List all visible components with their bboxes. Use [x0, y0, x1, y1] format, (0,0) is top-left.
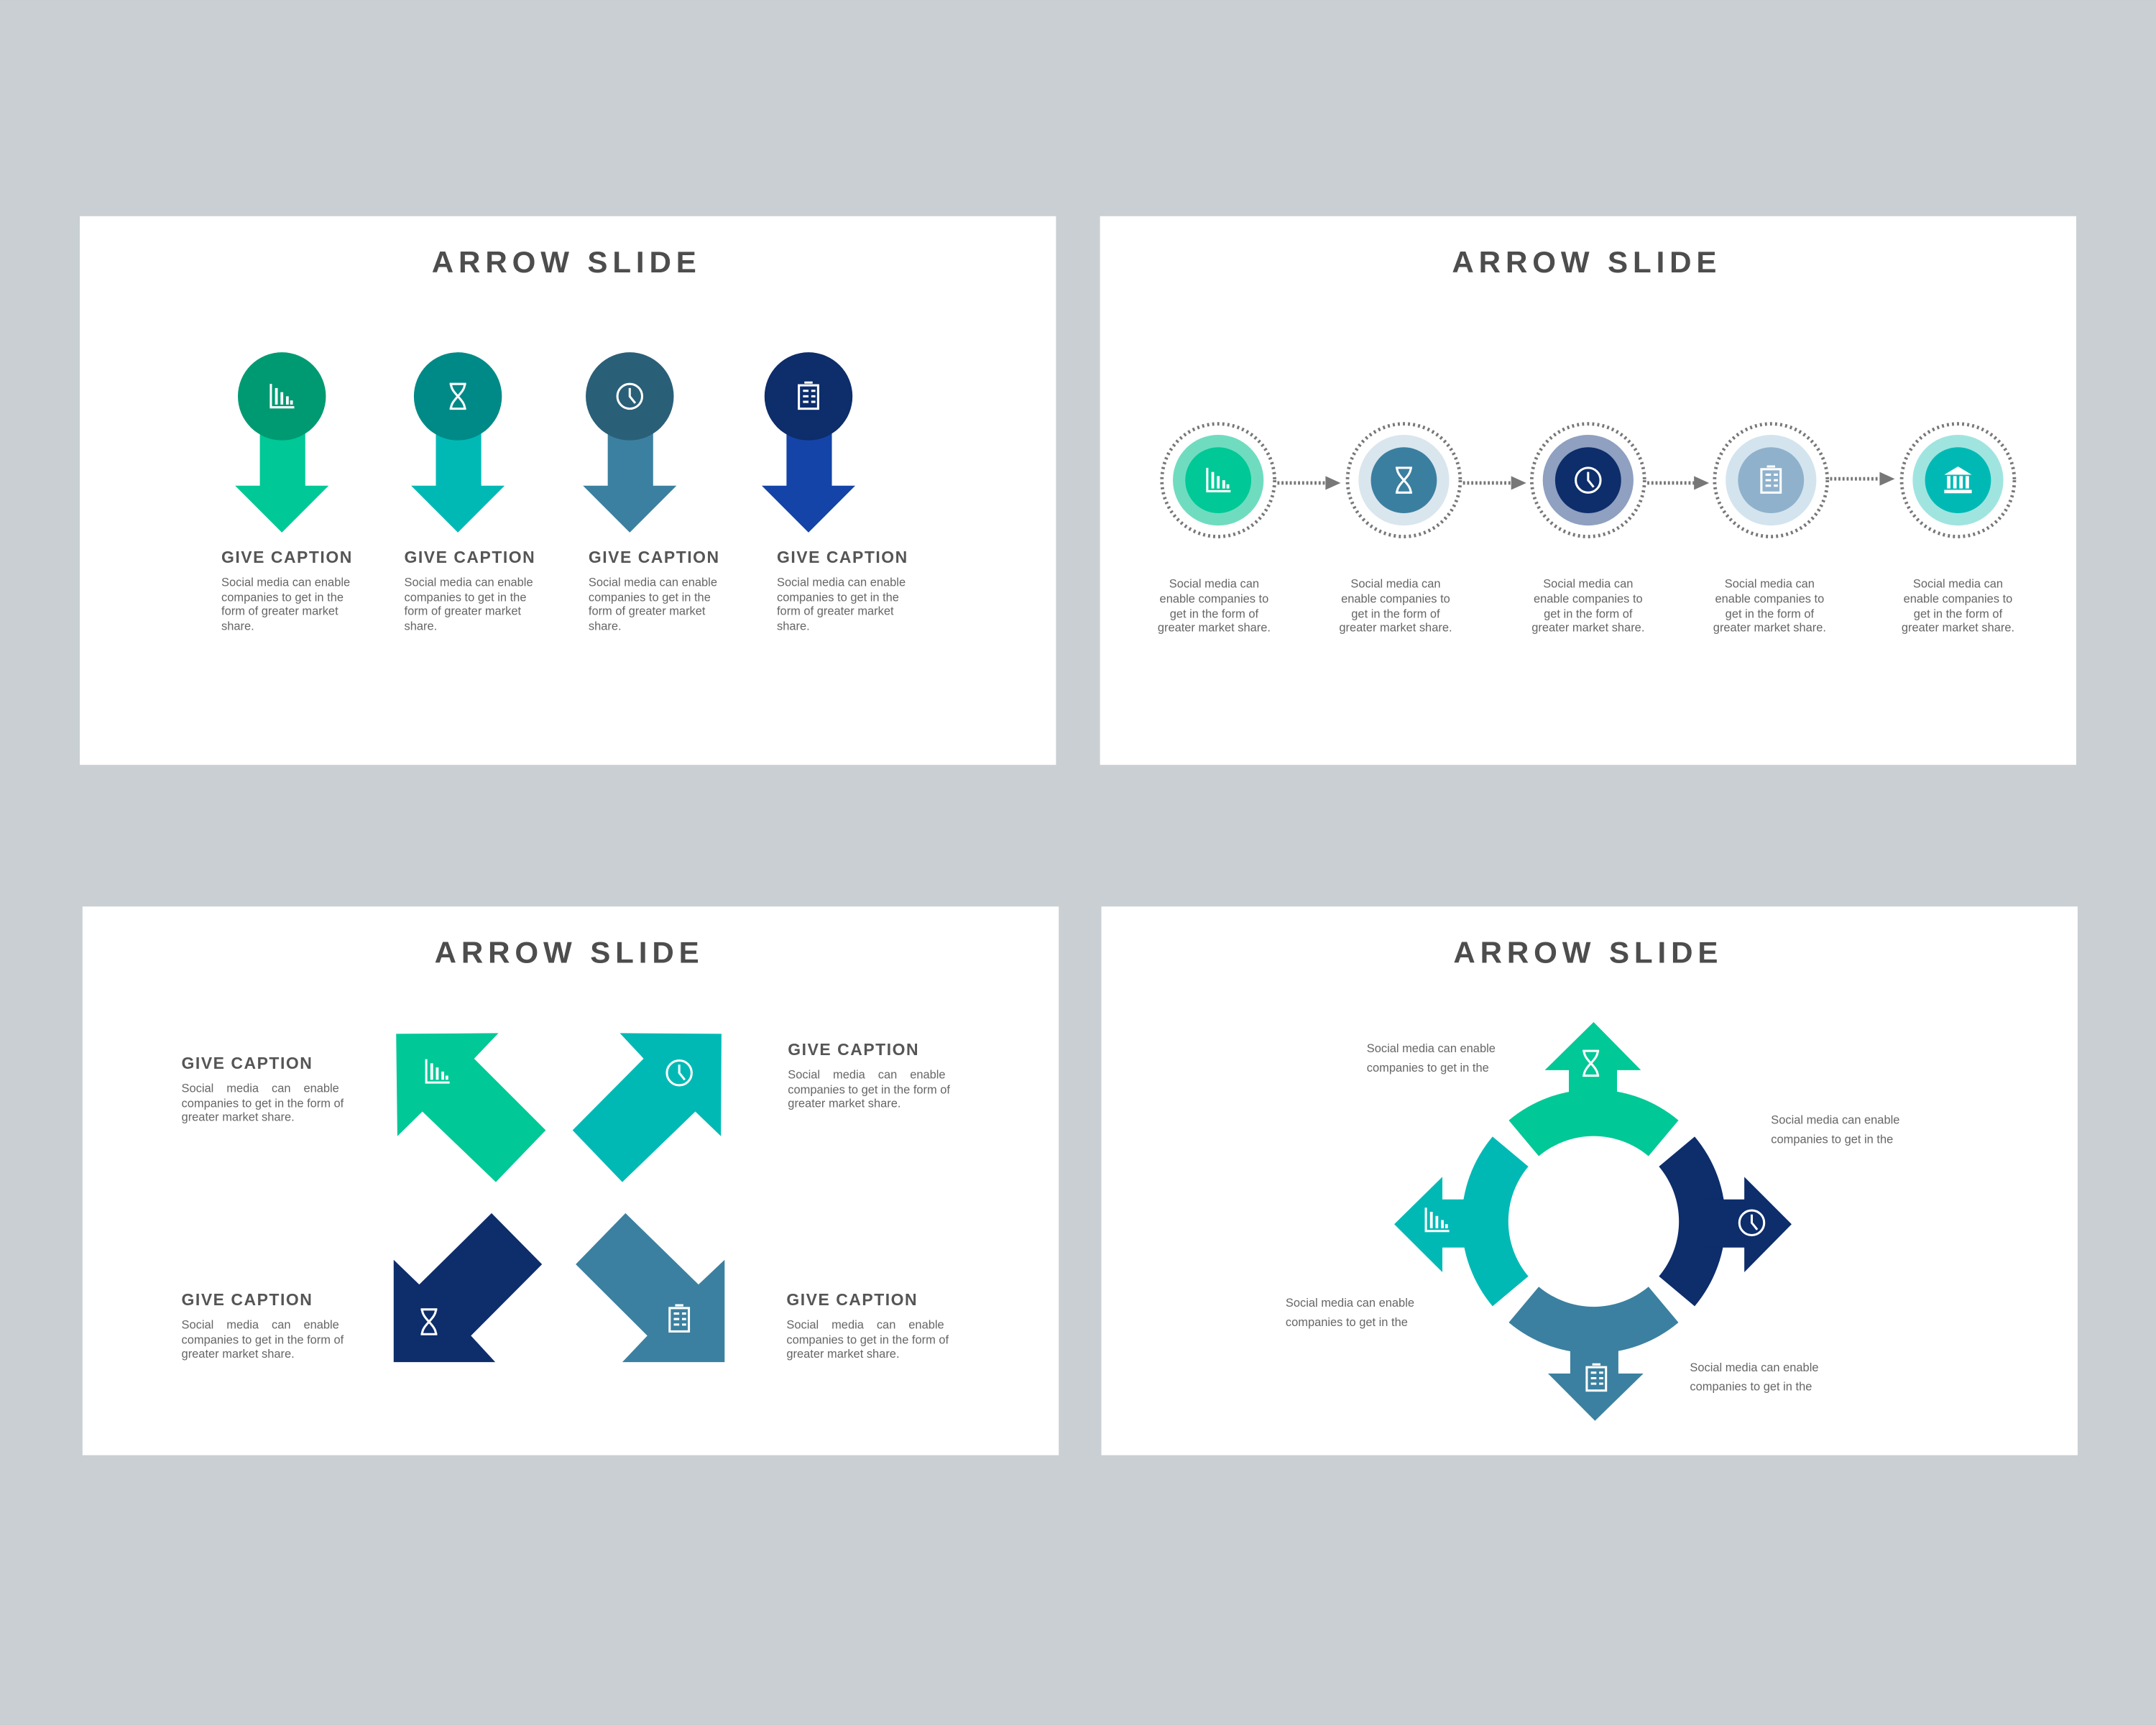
captions: companies to get in the — [777, 591, 899, 604]
step texts: greater market share. — [1902, 622, 2014, 635]
step texts: enable companies to — [1341, 592, 1450, 605]
ring arrow: bottom — [1508, 1287, 1679, 1421]
ring arrow: left — [1394, 1136, 1529, 1306]
step texts: Social media can — [1350, 577, 1441, 590]
captions: companies to get in the form of — [786, 1334, 949, 1347]
title: ARROW SLIDE — [1452, 245, 1721, 279]
captions — [221, 548, 908, 633]
captions: Social media can enable — [788, 1068, 946, 1081]
arrow: top-right — [573, 1033, 722, 1182]
texts: companies to get in the — [1771, 1133, 1893, 1146]
step texts: get in the form of — [1170, 607, 1259, 620]
step texts: greater market share. — [1158, 622, 1271, 635]
captions: share. — [404, 620, 437, 633]
captions: GIVE CAPTION — [788, 1040, 919, 1059]
captions: Social media can enable — [221, 576, 350, 589]
step texts: get in the form of — [1544, 607, 1633, 620]
step texts: get in the form of — [1914, 607, 2003, 620]
captions: share. — [777, 620, 810, 633]
texts: Social media can enable — [1771, 1114, 1899, 1127]
captions: GIVE CAPTION — [182, 1054, 313, 1072]
step texts: enable companies to — [1160, 592, 1268, 605]
arrow: bottom-right — [576, 1213, 724, 1362]
captions: form of greater market — [404, 605, 522, 618]
texts: Social media can enable — [1286, 1297, 1414, 1310]
captions — [182, 1040, 950, 1361]
captions: companies to get in the form of — [182, 1334, 344, 1347]
pin arrow 4 — [762, 352, 855, 533]
texts — [1286, 1042, 1899, 1394]
step texts: enable companies to — [1904, 592, 2012, 605]
step texts: enable companies to — [1534, 592, 1643, 605]
panel: circular arrows — [1102, 906, 2078, 1455]
captions: GIVE CAPTION — [221, 548, 353, 566]
panel: diagonal arrows — [83, 906, 1059, 1455]
captions: companies to get in the — [221, 591, 344, 604]
captions: GIVE CAPTION — [589, 548, 720, 566]
captions: greater market share. — [182, 1111, 295, 1124]
step texts: Social media can — [1543, 577, 1633, 590]
step texts: get in the form of — [1351, 607, 1440, 620]
captions: companies to get in the form of — [788, 1083, 950, 1096]
captions: GIVE CAPTION — [777, 548, 908, 566]
captions: greater market share. — [786, 1348, 900, 1361]
captions: Social media can enable — [589, 576, 717, 589]
step texts — [1158, 577, 2014, 635]
step texts: Social media can — [1725, 577, 1815, 590]
title: ARROW SLIDE — [1453, 936, 1723, 970]
ring arrow: right — [1659, 1136, 1792, 1306]
texts: companies to get in the — [1690, 1381, 1812, 1394]
captions: greater market share. — [182, 1348, 295, 1361]
captions: Social media can enable — [777, 576, 906, 589]
captions: Social media can enable — [182, 1082, 339, 1095]
pin arrow 3 — [583, 352, 676, 533]
pin arrow 2 — [411, 352, 505, 533]
step texts: greater market share. — [1713, 622, 1826, 635]
ring arrow: top — [1508, 1022, 1679, 1156]
connector arrows — [1277, 472, 1894, 490]
texts: Social media can enable — [1690, 1361, 1819, 1374]
step texts: Social media can — [1169, 577, 1259, 590]
pin arrow 1 — [235, 352, 328, 533]
captions: GIVE CAPTION — [404, 548, 535, 566]
captions: GIVE CAPTION — [786, 1290, 918, 1309]
step texts: get in the form of — [1726, 607, 1814, 620]
captions: Social media can enable — [182, 1319, 339, 1332]
captions: companies to get in the form of — [182, 1098, 344, 1110]
texts: companies to get in the — [1367, 1062, 1489, 1075]
step texts: enable companies to — [1715, 592, 1824, 605]
captions: companies to get in the — [589, 591, 711, 604]
step texts: greater market share. — [1339, 622, 1452, 635]
panel: circle process — [1100, 216, 2076, 765]
captions: Social media can enable — [786, 1319, 944, 1332]
title: ARROW SLIDE — [432, 245, 701, 279]
captions: share. — [221, 620, 254, 633]
captions: share. — [589, 620, 622, 633]
panel: vertical pin arrows — [80, 216, 1056, 765]
captions: form of greater market — [589, 605, 706, 618]
arrow: bottom-left — [394, 1213, 542, 1362]
step texts: greater market share. — [1531, 622, 1644, 635]
captions: GIVE CAPTION — [182, 1290, 313, 1309]
title: ARROW SLIDE — [435, 936, 704, 970]
step texts: Social media can — [1913, 577, 2003, 590]
captions: Social media can enable — [404, 576, 533, 589]
captions: form of greater market — [777, 605, 894, 618]
texts: Social media can enable — [1367, 1042, 1496, 1055]
captions: greater market share. — [788, 1098, 900, 1110]
captions: form of greater market — [221, 605, 338, 618]
arrow: top-left — [396, 1033, 545, 1182]
step circles — [1162, 424, 2014, 537]
texts: companies to get in the — [1286, 1316, 1408, 1329]
captions: companies to get in the — [404, 591, 526, 604]
